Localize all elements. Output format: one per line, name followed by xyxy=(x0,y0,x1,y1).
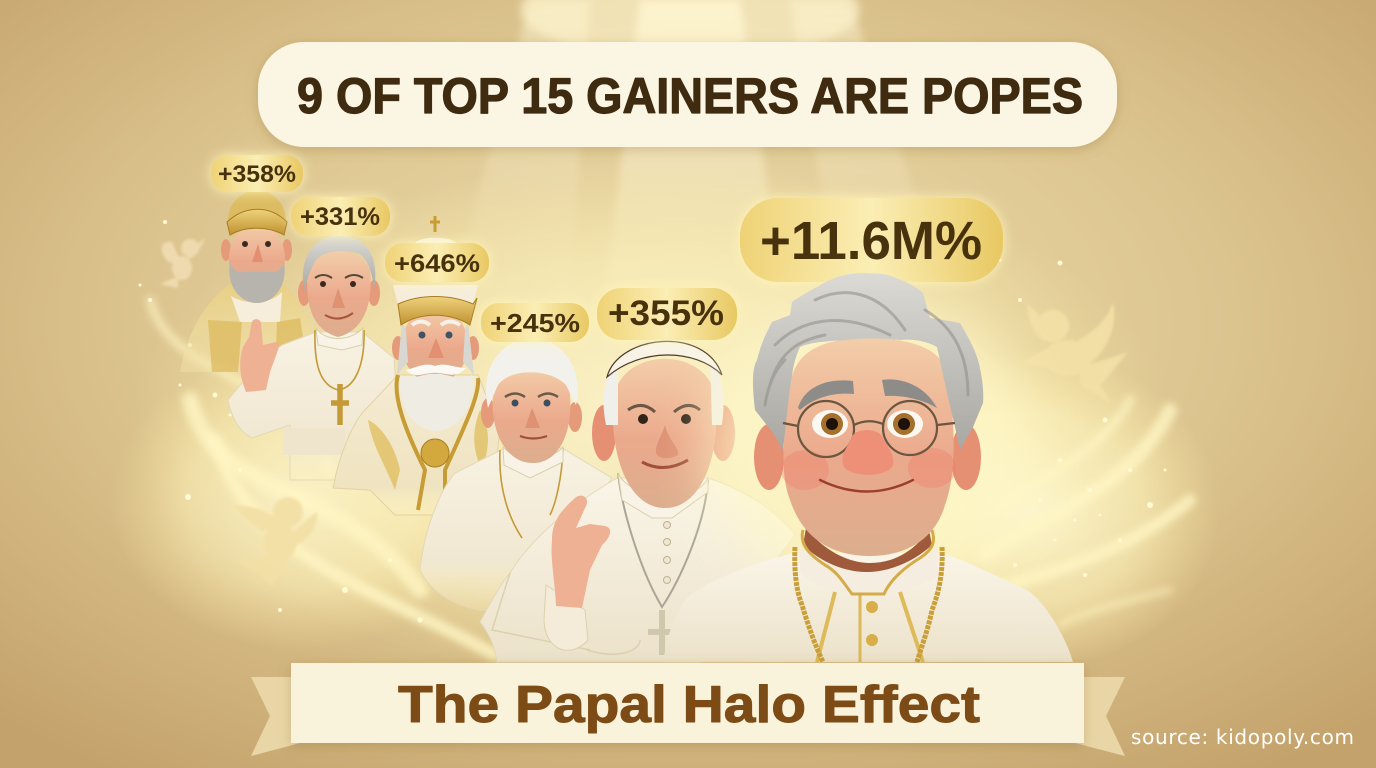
pope 4 collar xyxy=(503,447,563,478)
main pope neck shadow xyxy=(803,528,932,572)
main pope eyebrows xyxy=(798,379,937,410)
main pope eyes xyxy=(812,410,923,438)
pope 3 face xyxy=(402,307,468,383)
pope 3 side hair xyxy=(397,322,474,375)
light rays from top xyxy=(450,0,950,340)
main pope nose xyxy=(842,430,893,475)
pope 3 moustache xyxy=(406,365,466,375)
pope 5 robe xyxy=(480,478,795,662)
title banner: 9 OF TOP 15 GAINERS ARE POPES xyxy=(297,68,1083,124)
label +331%: +331% xyxy=(300,203,380,231)
pope 5 cuff and hand xyxy=(544,496,610,650)
pope 3 embroidery xyxy=(368,410,488,490)
main pope hair strands xyxy=(765,293,968,405)
sparkle particles xyxy=(138,220,1166,622)
pope 3 bearded with tiara xyxy=(333,216,500,515)
title banner xyxy=(258,42,1117,147)
label +245% xyxy=(481,303,589,342)
bottom ribbon xyxy=(251,663,1125,756)
main pope face xyxy=(784,338,954,556)
label +331% xyxy=(291,197,390,236)
icon: angel bottom left xyxy=(234,497,317,587)
pope 2 hand xyxy=(240,319,279,392)
pope 4 hair xyxy=(486,338,578,408)
main pope placket xyxy=(858,594,862,662)
pope 2 chain and cross xyxy=(315,330,364,425)
pope 4 ears xyxy=(481,398,582,432)
pope 3 gold trim xyxy=(397,375,478,512)
label +11.6M% xyxy=(740,198,1003,282)
pope 1 ears xyxy=(221,239,292,261)
pope 5 waving xyxy=(480,341,795,662)
pope 5 side hair xyxy=(603,358,724,425)
pope 5 chain and cross xyxy=(618,473,708,655)
pope 3 robe xyxy=(333,375,500,515)
pope 3 tiara xyxy=(393,216,478,325)
pope 1 white collar xyxy=(231,292,282,322)
pope 5 features xyxy=(628,405,700,468)
label +355% xyxy=(597,288,737,340)
main pope glow xyxy=(705,300,1035,600)
ribbon tails xyxy=(251,677,1125,756)
pope 5 buttons xyxy=(664,522,670,584)
pope 2 face xyxy=(307,251,371,337)
main pope collar trim xyxy=(802,530,934,594)
main pope glasses xyxy=(783,401,955,457)
source note: source: kidopoly.com xyxy=(1131,725,1354,749)
bottom ribbon: The Papal Halo Effect xyxy=(398,676,980,734)
pope 4 robe xyxy=(420,448,612,610)
pope 2 sash xyxy=(283,428,345,455)
pope 1 beard xyxy=(229,262,285,303)
main pope buttons xyxy=(866,601,878,646)
pope 3 eyes xyxy=(412,322,460,358)
pope 2 collar xyxy=(316,328,363,350)
icon: angel right xyxy=(1022,302,1128,404)
pope 4 xyxy=(420,338,612,610)
pope 4 features xyxy=(505,394,558,438)
pope 5 zucchetto xyxy=(607,341,722,377)
pope 3 beard xyxy=(400,374,473,431)
pope 2 robe xyxy=(228,332,398,480)
main pope straps xyxy=(817,592,923,662)
pope 1 gold stole xyxy=(208,318,305,372)
label +11.6M%: +11.6M% xyxy=(760,211,982,271)
label +245%: +245% xyxy=(490,308,580,338)
pope 2 hair xyxy=(303,235,375,292)
label +646% xyxy=(385,243,489,282)
pope 3 medallion xyxy=(421,439,449,467)
pope 4 chain xyxy=(500,448,563,538)
pope 1 with gold tiara xyxy=(180,190,314,372)
pope 1 face xyxy=(229,224,285,292)
pope 5 collar xyxy=(618,473,708,518)
pope 1 robe xyxy=(180,283,314,372)
pope 3 ears xyxy=(392,336,479,360)
main pope gold chain xyxy=(795,547,942,662)
pope 2 features xyxy=(315,275,363,319)
main pope smile xyxy=(820,480,913,492)
pope 4 face xyxy=(493,369,570,463)
main pope cheeks xyxy=(781,448,956,490)
label +355%: +355% xyxy=(608,294,724,333)
label +358%: +358% xyxy=(218,161,296,188)
pope 5 mozzetta edge xyxy=(492,573,640,654)
golden glow and swirls behind the popes xyxy=(110,160,1220,680)
pope 2 waving xyxy=(228,235,398,480)
main pope hair xyxy=(753,273,983,450)
pope 1 tiara xyxy=(227,190,287,235)
pope 1 eyes xyxy=(242,241,271,262)
label +358% xyxy=(211,155,303,192)
pope 2 ears xyxy=(298,280,380,306)
icon: angel top left xyxy=(160,238,205,288)
main pope robe xyxy=(663,553,1073,662)
pope 5 face xyxy=(613,359,717,508)
label +646%: +646% xyxy=(394,250,480,278)
main pope ears xyxy=(754,424,981,490)
pope 6 main large cartoon pope xyxy=(663,273,1073,662)
main pope collar xyxy=(798,545,938,594)
pope 5 ears xyxy=(592,405,735,461)
